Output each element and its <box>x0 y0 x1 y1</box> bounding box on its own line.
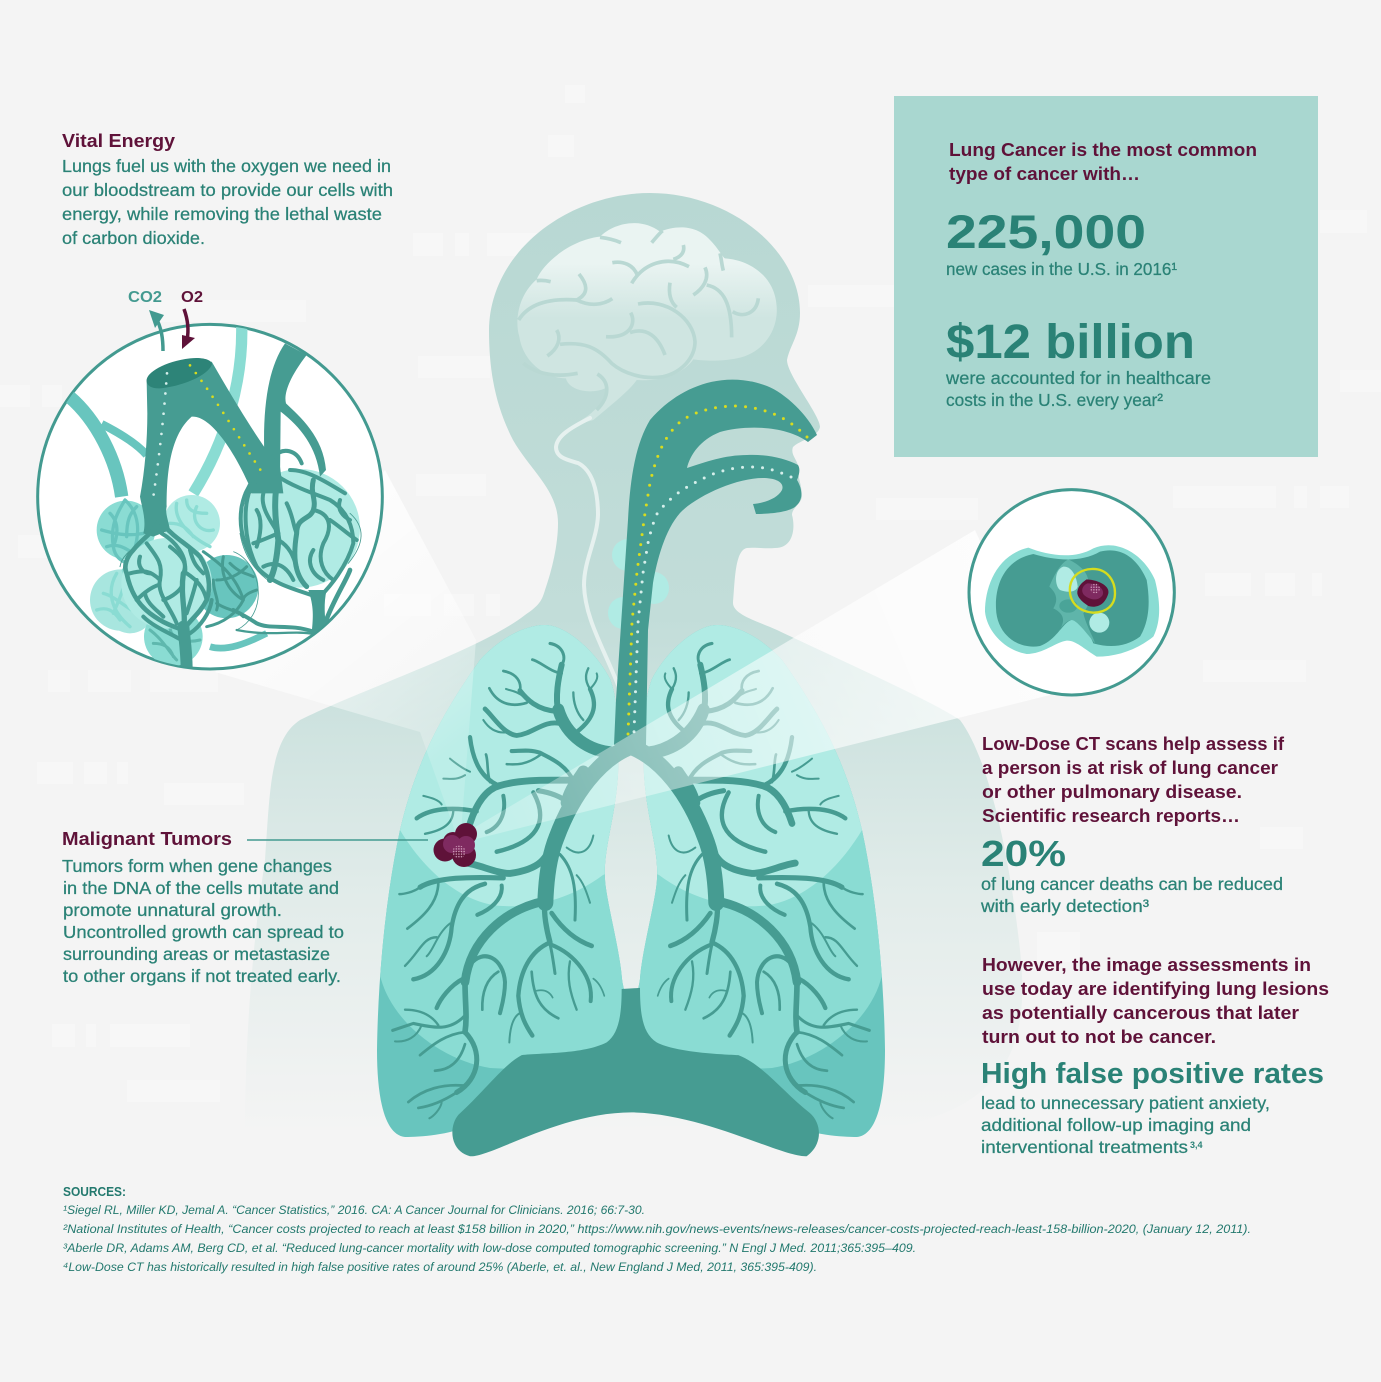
stat: $12 billion: $12 billion <box>946 316 1195 369</box>
text block: Malignant Tumors: surrounding areas or metastasize <box>63 944 330 964</box>
sources: SOURCES: <box>63 1185 126 1199</box>
heading: Vital Energy: Vital Energy <box>62 131 175 151</box>
diaphragm <box>452 988 819 1156</box>
text block: Malignant Tumors: Tumors form when gene changes <box>62 856 332 876</box>
text block: Vital Energy: our bloodstream to provide our cells with <box>62 180 393 200</box>
stat caption: early detection: of lung cancer deaths can be reduced <box>981 874 1283 894</box>
stat caption: healthcare costs <box>945 368 1211 410</box>
sources <box>63 1185 1251 1274</box>
sources: ¹Siegel RL, Miller KD, Jemal A. “Cancer Statistics,” 2016. CA: A Cancer Journal for Clinicians. 2016; 66:7-30. <box>63 1203 645 1217</box>
statistics heading <box>949 140 1257 184</box>
nerve / spinal cord <box>556 418 620 690</box>
stat caption: early detection: with early detection³ <box>980 896 1149 916</box>
bronchiole tube <box>140 362 283 537</box>
stat: 20%: 20% <box>981 833 1066 874</box>
back vessels <box>69 323 267 648</box>
stat caption: anxiety and treatments: lead to unnecessary patient anxiety, <box>981 1093 1270 1113</box>
text block: Vital Energy: Lungs fuel us with the oxygen we need in <box>62 156 391 176</box>
heading: Malignant Tumors: Malignant Tumors <box>62 829 232 849</box>
text block: image assessments: However, the image assessments in <box>982 955 1311 975</box>
front cluster veins <box>120 528 214 667</box>
tumor in CT <box>1077 579 1109 607</box>
stat: High false positive rates: High false positive rates <box>981 1058 1324 1090</box>
stat caption: healthcare costs: costs in the U.S. every year² <box>946 390 1163 410</box>
text block: Malignant Tumors: to other organs if not treated early. <box>63 966 341 986</box>
arrow: CO2 out <box>155 316 163 351</box>
stat caption: healthcare costs: were accounted for in healthcare <box>945 368 1211 388</box>
brain <box>517 223 777 422</box>
stat caption: anxiety and treatments: interventional treatments <box>981 1137 1188 1157</box>
stat caption: new cases: new cases in the U.S. in 2016¹ <box>946 259 1177 279</box>
stat caption: early detection <box>980 874 1283 916</box>
statistics heading: Lung Cancer is the most common <box>949 140 1257 160</box>
sources: ⁴Low-Dose CT has historically resulted in high false positive rates of around 25% (Aberle, et. al., New England J Med, 2011, 365:395-409). <box>63 1260 817 1274</box>
text block: Malignant Tumors: Uncontrolled growth can spread to <box>63 922 344 942</box>
statistics heading: type of cancer with… <box>949 164 1140 184</box>
human body silhouette <box>245 193 1022 1130</box>
stat caption: anxiety and treatments: 3,4 <box>1190 1140 1203 1150</box>
text block: Vital Energy: of carbon dioxide. <box>62 228 205 248</box>
light beam: CT scan <box>440 530 1050 848</box>
airway and trachea <box>545 380 817 903</box>
text block: Low-Dose CT <box>982 734 1285 826</box>
text block: Vital Energy <box>62 156 393 248</box>
text block: Low-Dose CT: Low-Dose CT scans help assess if <box>982 734 1285 754</box>
sources: ²National Institutes of Health, “Cancer costs projected to reach at least $158 billion in 2020,” https://www.nih.gov/news-events/news-releases/cancer-costs-projected-reach-least-158-billion-2020, (January 12, 2011). <box>63 1222 1251 1236</box>
light beam: left magnifier <box>215 470 476 845</box>
text block: image assessments: as potentially cancerous that later <box>982 1003 1299 1023</box>
right vessel <box>264 343 326 480</box>
text block: Malignant Tumors <box>62 856 344 986</box>
sources: ³Aberle DR, Adams AM, Berg CD, et al. “Reduced lung-cancer mortality with low-dose computed tomographic screening.” N Engl J Med. 2011;365:395–409. <box>63 1241 916 1255</box>
label: CO2: CO2 <box>128 289 162 306</box>
back alveoli clusters <box>90 495 258 666</box>
text block: image assessments: use today are identifying lung lesions <box>982 979 1329 999</box>
tumor in lung <box>247 823 477 867</box>
right cluster veins <box>233 451 361 634</box>
stat caption: anxiety and treatments <box>981 1093 1270 1157</box>
label: O2: O2 <box>181 289 203 306</box>
text block: Vital Energy: energy, while removing the lethal waste <box>62 204 382 224</box>
panel: CT scan circle <box>969 490 1174 695</box>
lymph nodes <box>608 539 669 629</box>
text block: Low-Dose CT: or other pulmonary disease. <box>982 782 1242 802</box>
panel: statistics <box>894 96 1318 457</box>
arrow: O2 in <box>184 309 188 340</box>
lungs <box>360 600 902 1160</box>
stat caption: anxiety and treatments: additional follow-up imaging and <box>981 1115 1251 1135</box>
text block: image assessments <box>982 955 1329 1047</box>
stat: 225,000: 225,000 <box>946 205 1146 258</box>
text block: Low-Dose CT: a person is at risk of lung cancer <box>982 758 1278 778</box>
text block: Low-Dose CT: Scientific research reports… <box>982 806 1240 826</box>
text block: Malignant Tumors: promote unnatural growth. <box>63 900 282 920</box>
front alveoli clusters <box>121 469 360 629</box>
text block: image assessments: turn out to not be cancer. <box>982 1027 1216 1047</box>
text block: Malignant Tumors: in the DNA of the cells mutate and <box>63 878 339 898</box>
panel: alveoli magnifier <box>38 323 382 670</box>
